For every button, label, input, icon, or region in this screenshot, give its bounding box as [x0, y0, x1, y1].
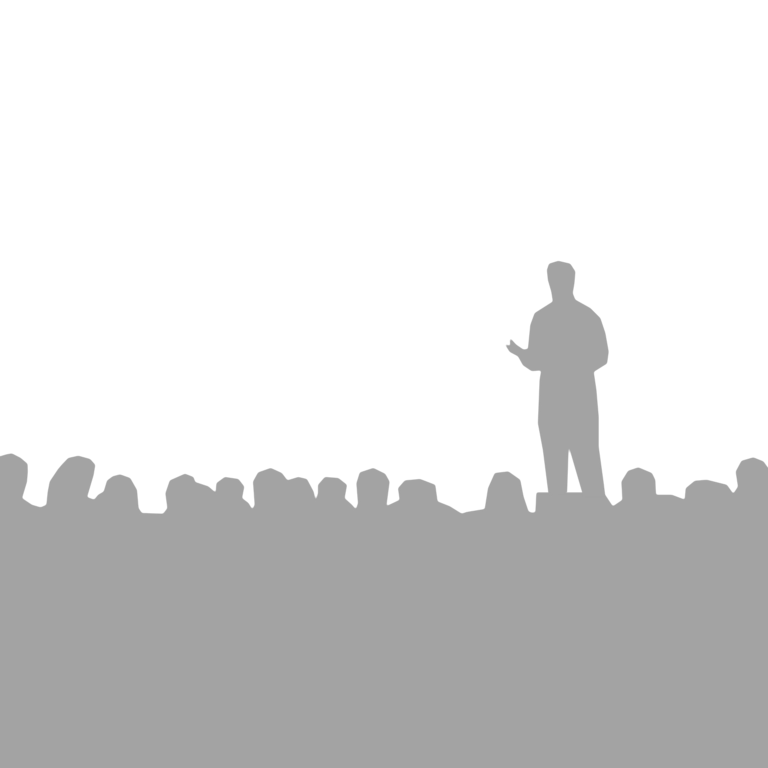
speaker silhouette: [506, 261, 608, 497]
audience silhouette: [0, 454, 768, 768]
